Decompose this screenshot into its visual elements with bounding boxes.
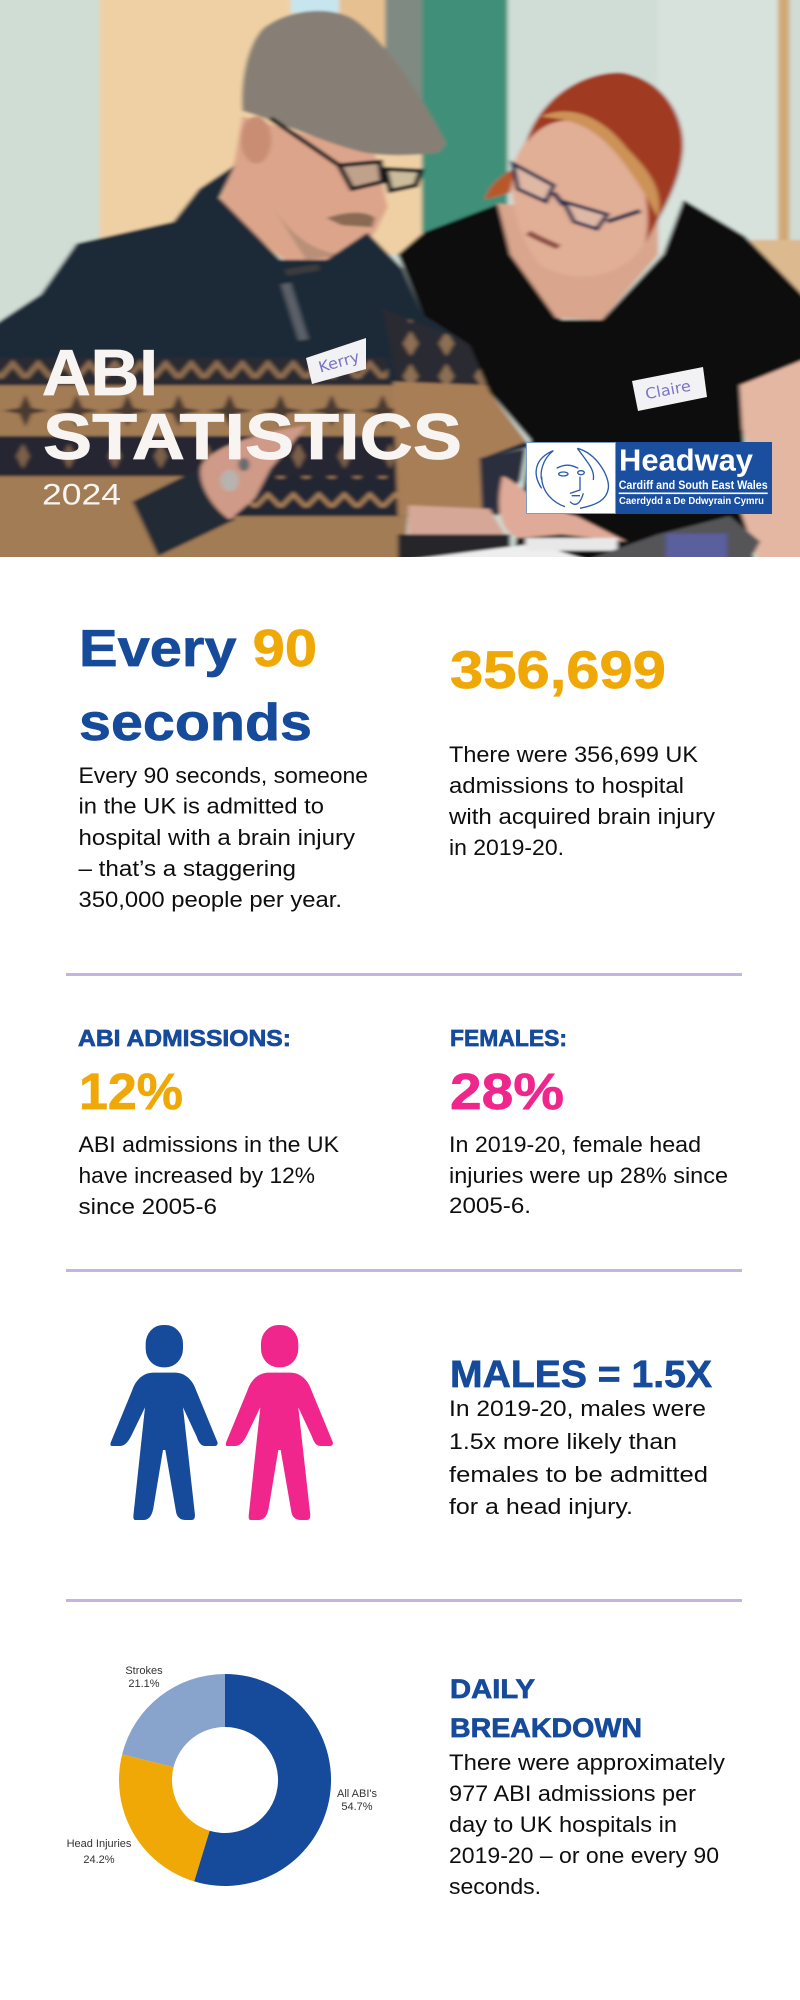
heading: daily breakdown: BREAKDOWN — [450, 1713, 642, 1743]
text: every 90 seconds: 350,000 people per year. — [78, 887, 342, 912]
text: every 90 seconds: in the UK is admitted to — [78, 794, 324, 818]
text: daily breakdown: 2019-20 – or one every 90 — [449, 1843, 719, 1868]
text: males: In 2019-20, males were — [449, 1396, 706, 1421]
man's patterned sweater — [0, 165, 531, 582]
title: 2024 — [42, 478, 121, 512]
heading: males 1.5x: MALES = 1.5X — [450, 1354, 713, 1396]
man's flat cap — [242, 11, 446, 155]
text: females: 2005-6. — [449, 1193, 531, 1218]
segment: Head Injuries 24.2% — [119, 1754, 210, 1881]
title: ABI — [42, 336, 158, 409]
heading: Every 90 seconds: seconds — [79, 694, 312, 752]
text: daily breakdown: seconds. — [449, 1874, 541, 1899]
photo backdrop walls and door — [0, 0, 800, 582]
text: every 90 seconds — [78, 763, 368, 912]
label: All ABI's: All ABI's — [337, 1788, 377, 1800]
heading: daily breakdown — [450, 1674, 642, 1743]
title: STATISTICS — [43, 400, 462, 473]
heading: females: FEMALES: — [450, 1025, 567, 1051]
text: 356,699 admissions — [448, 742, 716, 860]
name tag: Kerry: Kerry — [316, 348, 362, 376]
stat: 12%: 12% — [79, 1063, 183, 1120]
text: ABI admissions: have increased by 12% — [78, 1163, 315, 1188]
man's right hand — [499, 476, 627, 542]
logo: Headway — [526, 442, 772, 514]
text: females: In 2019-20, female head — [449, 1132, 701, 1157]
text: 356,699 admissions: admissions to hospital — [449, 773, 684, 798]
label: Strokes: 21.1% — [128, 1678, 160, 1690]
segment: Strokes 21.1% — [122, 1674, 225, 1767]
label: Strokes — [125, 1665, 163, 1690]
logo face drawing — [536, 448, 608, 508]
heading: Every 90 seconds — [79, 620, 317, 752]
name tag: Claire: Claire — [644, 377, 692, 403]
text: every 90 seconds: hospital with a brain injury — [78, 825, 356, 850]
logo: Headway: Cardiff and South East Wales — [619, 480, 768, 492]
hero photo: man and woman at a table — [0, 0, 800, 582]
text: females — [449, 1132, 728, 1218]
text: 356,699 admissions: in 2019-20. — [449, 835, 564, 860]
heading: daily breakdown: DAILY — [450, 1674, 535, 1704]
text: daily breakdown: day to UK hospitals in — [449, 1812, 677, 1837]
text: males: 1.5x more likely than — [449, 1429, 677, 1454]
text: 356,699 admissions: with acquired brain injury — [448, 804, 716, 829]
label: Head Injuries: Head Injuries — [67, 1838, 132, 1850]
text: ABI admissions: since 2005-6 — [78, 1194, 217, 1219]
title — [42, 336, 462, 512]
text: females: injuries were up 28% since — [449, 1163, 728, 1188]
text: daily breakdown: There were approximately — [449, 1750, 726, 1775]
man's glasses — [270, 118, 421, 191]
icon: male and female figures — [110, 1325, 333, 1520]
text: daily breakdown — [449, 1750, 726, 1899]
label: Head Injuries — [67, 1838, 132, 1866]
text: males — [449, 1396, 708, 1519]
name tag: Kerry — [306, 338, 366, 384]
stat: 28%: 28% — [450, 1063, 564, 1120]
heading: Every 90 seconds: Every 90 — [79, 620, 317, 678]
logo: Headway: Headway — [619, 442, 754, 478]
woman's head and neck — [485, 73, 683, 320]
woman's arm — [740, 354, 800, 582]
text: 356,699 admissions: There were 356,699 UK — [449, 742, 698, 767]
text: every 90 seconds: – that’s a staggering — [78, 856, 296, 881]
text: males: females to be admitted — [449, 1462, 708, 1487]
man's head — [219, 116, 388, 262]
stat: 356,699: 356,699 — [450, 641, 666, 700]
man's left hand with rings — [200, 425, 306, 520]
woman's black shirt — [398, 200, 800, 582]
name tag: Claire — [632, 367, 707, 411]
label: Head Injuries: 24.2% — [83, 1854, 115, 1866]
segment: All ABI's 54.7% — [194, 1674, 331, 1886]
heading: ABI admissions: ABI ADMISSIONS: — [78, 1025, 291, 1051]
text: ABI admissions: ABI admissions in the UK — [78, 1132, 339, 1157]
icon: male figure — [110, 1325, 218, 1520]
icon: female figure — [226, 1325, 333, 1520]
text: ABI admissions — [78, 1132, 339, 1219]
label: Strokes: Strokes — [125, 1665, 163, 1677]
text: daily breakdown: 977 ABI admissions per — [449, 1781, 697, 1806]
text: males: for a head injury. — [449, 1494, 633, 1519]
donut chart: daily breakdown — [67, 1665, 377, 1886]
label: All ABI's: 54.7% — [341, 1801, 373, 1813]
table with phone and device — [408, 516, 760, 560]
logo: Headway: Caerdydd a De Ddwyrain Cymru — [619, 495, 764, 507]
text: every 90 seconds: Every 90 seconds, someone — [78, 763, 368, 788]
label: All ABI's — [337, 1788, 377, 1813]
